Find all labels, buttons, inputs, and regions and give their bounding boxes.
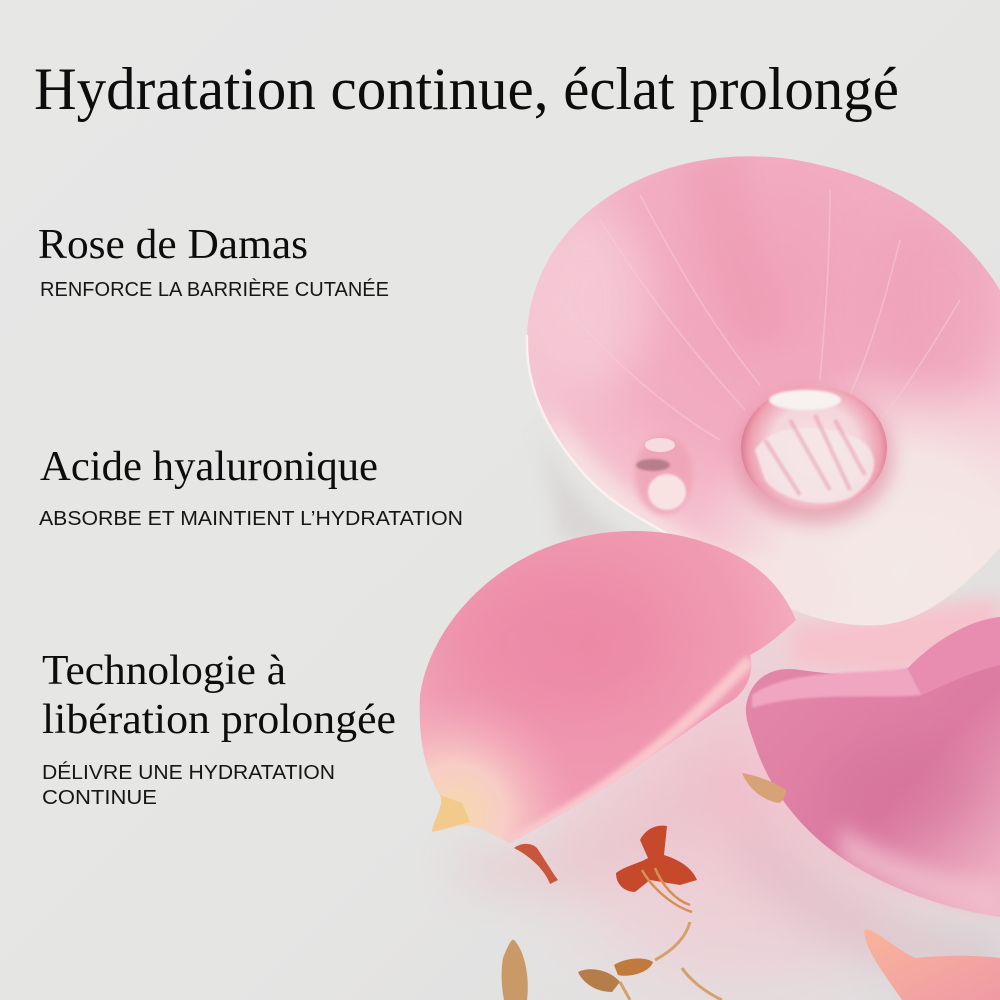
petal: bottom right fragment [864,929,1000,1000]
soft pink glow and shadows [440,430,1000,1000]
petal: right petal [746,617,1000,917]
block: Technologie à libération prolongée: libération prolongée [42,697,396,743]
petal: large upper petal with water drops [527,150,1000,640]
block: Technologie à libération prolongée: DÉLIVRE UNE HYDRATATION [42,761,335,784]
petal: central petal [420,531,796,843]
dried stamens and fragments [502,773,786,1000]
block: Technologie à libération prolongée: CONTINUE [42,787,157,809]
block: Acide hyaluronique: ABSORBE ET MAINTIENT L’HYDRATATION [39,508,463,530]
icon: small water drop [635,435,693,515]
icon: large water drop [737,386,893,524]
block: Acide hyaluronique: Acide hyaluronique [40,444,378,490]
block: Rose de Damas: RENFORCE LA BARRIÈRE CUTANÉE [40,278,389,301]
block: Rose de Damas [38,222,389,301]
block: Technologie à libération prolongée: Technologie à [42,648,286,694]
block: Acide hyaluronique [39,444,463,530]
block: Technologie à libération prolongée [42,648,396,809]
title: Hydratation continue, éclat prolongé [34,56,899,122]
block: Rose de Damas: Rose de Damas [38,222,308,268]
